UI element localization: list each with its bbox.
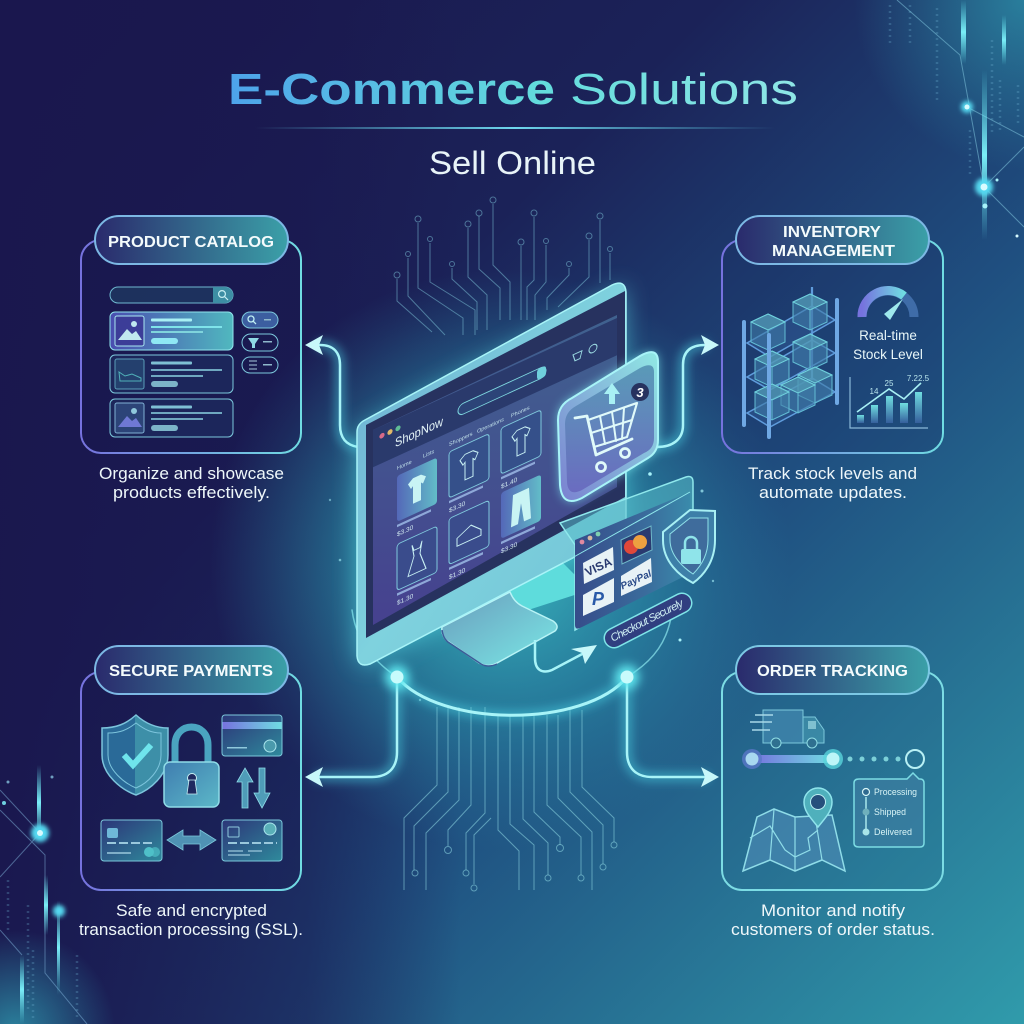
heading pill (736, 216, 929, 264)
product tile 6 (501, 474, 541, 555)
panel: secure payments (81, 646, 301, 890)
nav: Lists (423, 449, 434, 460)
stand base (442, 592, 557, 666)
caption: product catalog: products effectively. (113, 484, 270, 502)
bar chart (850, 374, 930, 428)
subtitle: Sell Online (429, 145, 596, 181)
product tile 3: $1.40 (501, 477, 517, 491)
card: visa: VISA (583, 555, 614, 579)
checkout panel (560, 477, 715, 645)
search bar (110, 287, 233, 303)
heading pill (736, 646, 929, 694)
heading pill: ORDER TRACKING (757, 663, 908, 680)
dark window (575, 492, 693, 629)
stand neck (505, 560, 590, 612)
padlock (164, 727, 219, 807)
nav: Operations (477, 417, 504, 435)
product tile 6: $3.30 (501, 541, 517, 555)
gauge (862, 290, 914, 320)
window dots (580, 532, 600, 544)
browser header (373, 318, 617, 467)
cart badge (631, 383, 649, 401)
product tile 5: $1.30 (449, 567, 465, 581)
caption: order tracking (731, 902, 935, 939)
row 3 (110, 399, 233, 437)
caption: order tracking: customers of order status. (731, 921, 935, 939)
progress bar (742, 749, 924, 769)
caption: secure payments: transaction processing (SSL). (79, 921, 303, 939)
heading pill: SECURE PAYMENTS (109, 663, 273, 680)
connector: to product catalog (320, 345, 358, 447)
card: visa (583, 547, 614, 584)
title (228, 65, 798, 114)
cart icon (575, 403, 637, 472)
arrow heads (305, 335, 719, 787)
circuit lines below monitor (404, 707, 617, 891)
product tile 2: $3.30 (449, 500, 465, 515)
card: paypal: PayPal (619, 568, 654, 592)
title: E-Commerce (228, 65, 555, 114)
panel: inventory management (722, 216, 943, 453)
window dots (379, 425, 401, 439)
search bar (458, 365, 546, 416)
panel: product catalog (81, 216, 301, 453)
status tooltip: Shipped (874, 807, 906, 817)
heading pill: PRODUCT CATALOG (108, 234, 274, 251)
translucent window (560, 477, 693, 630)
caption: product catalog (99, 465, 284, 502)
connector arrows (318, 345, 706, 777)
caption: secure payments: Safe and encrypted (116, 902, 267, 920)
stand arrow (535, 640, 597, 672)
status tooltip: Processing (874, 787, 917, 797)
gauge label: Real-time (859, 328, 917, 343)
up arrow (604, 383, 620, 404)
caption: product catalog: Organize and showcase (99, 465, 284, 483)
cart card (558, 352, 658, 501)
product tile 4: $1.30 (397, 593, 413, 607)
arc under monitor (397, 677, 627, 715)
monitor stand (442, 560, 590, 666)
bar chart: 25 (885, 379, 894, 388)
dark bezel (366, 291, 625, 638)
panel frame (722, 240, 943, 453)
cart icons (573, 343, 597, 362)
sparkle particles (329, 472, 714, 701)
product tile 3 (501, 410, 541, 491)
truck (750, 710, 824, 748)
product tile 1 (397, 457, 437, 538)
nav: Shoppers (449, 431, 473, 448)
caption: secure payments (79, 902, 303, 939)
card: bottom left (101, 820, 162, 861)
monitor (357, 283, 626, 665)
status tooltip: Delivered (874, 827, 912, 837)
card: top (222, 715, 282, 756)
monitor glow (357, 285, 625, 665)
title underline (255, 127, 775, 129)
heading pill: MANAGEMENT (772, 243, 896, 260)
product tile 5 (449, 500, 489, 581)
exchange arrows (237, 768, 270, 808)
connector: to secure payments (318, 677, 397, 777)
caption: order tracking: Monitor and notify (761, 902, 906, 920)
card outer (558, 352, 658, 501)
nav: Phones (511, 405, 530, 419)
bar chart: 7.22.5 (907, 374, 930, 383)
corner network: bottom left (0, 765, 87, 1024)
caption: inventory management: Track stock levels and (748, 465, 917, 483)
status tooltip (854, 773, 924, 847)
shield (102, 715, 168, 795)
nav: Home (397, 459, 412, 472)
shield with lock (663, 510, 715, 583)
panel frame (81, 240, 301, 453)
heading pill (95, 646, 288, 694)
screen content (373, 318, 617, 618)
monitor frame (357, 283, 626, 665)
product tile 1: $3.30 (397, 524, 413, 538)
checkout button: Checkout Securely (609, 597, 687, 645)
circuit lines above monitor (394, 197, 612, 335)
screen (373, 315, 617, 625)
double arrow (167, 830, 216, 850)
caption: inventory management: automate updates. (759, 484, 907, 502)
cart badge: 3 (636, 385, 644, 400)
connector: to order tracking (627, 677, 706, 777)
card glow (558, 352, 658, 501)
title: Solutions (570, 65, 798, 114)
caption: inventory management (748, 465, 917, 502)
panel frame (81, 672, 301, 890)
row 1 (110, 312, 233, 350)
connector nodes (385, 665, 639, 689)
bar chart: 14 (870, 387, 879, 396)
map with pin (743, 788, 845, 871)
gauge label: Stock Level (853, 347, 923, 362)
row 2 (110, 355, 233, 393)
card: bottom right (222, 820, 282, 861)
corner network: top right (890, 0, 1024, 240)
product tile 4 (397, 526, 437, 607)
card face (565, 365, 654, 492)
card: mastercard (621, 526, 652, 564)
nav (397, 405, 530, 472)
connector glow (318, 345, 706, 777)
panel frame (722, 672, 943, 890)
product tile 2 (449, 434, 489, 515)
shop name: ShopNow (395, 414, 443, 450)
warehouse shelves (744, 287, 837, 437)
heading pill (95, 216, 288, 264)
filter pills (242, 312, 278, 373)
connector: to inventory (657, 345, 705, 447)
gauge label (853, 328, 923, 362)
card: paypal logo (583, 578, 614, 616)
card: paypal logo: P (592, 589, 605, 609)
panel: order tracking (722, 646, 943, 890)
card: paypal (619, 558, 654, 596)
heading pill: INVENTORY (783, 224, 882, 241)
